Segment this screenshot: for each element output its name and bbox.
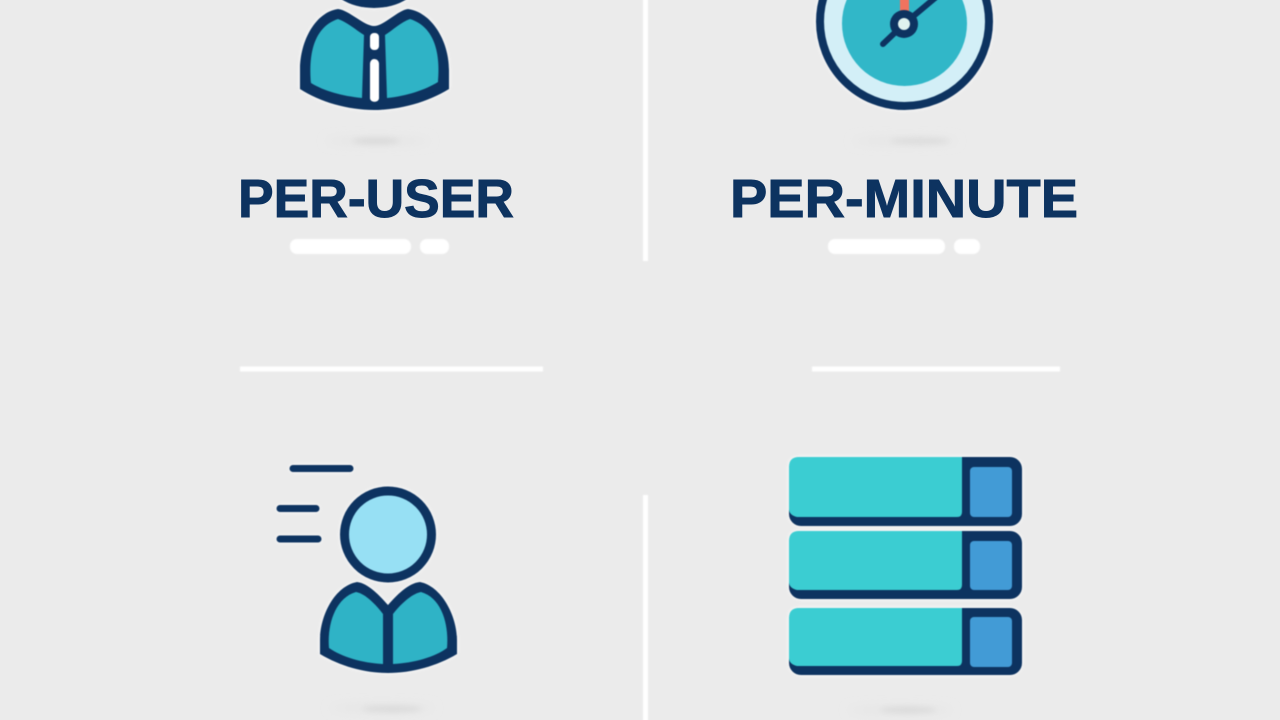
heading: per-minute: PER-MINUTE <box>730 169 1078 229</box>
panel: usage tiers <box>789 457 1022 713</box>
icon: user with tie <box>300 0 449 110</box>
icon shadow <box>326 138 430 144</box>
icon: stopwatch <box>820 0 989 106</box>
panel: per-minute <box>730 0 1078 254</box>
icon: stacked server bars <box>789 457 1022 675</box>
panel: active user <box>280 468 457 712</box>
heading: per-user: PER-USER <box>238 169 514 229</box>
icon: user with motion lines <box>280 468 457 673</box>
bar 3 <box>789 608 1022 675</box>
icon shadow <box>330 705 434 712</box>
panel: per-user <box>238 0 514 254</box>
icon shadow <box>853 138 957 144</box>
bar 1 <box>789 457 1022 526</box>
icon shadow <box>848 707 952 713</box>
placeholder pills <box>828 239 980 254</box>
bar 2 <box>789 531 1022 599</box>
placeholder pills <box>290 239 449 254</box>
